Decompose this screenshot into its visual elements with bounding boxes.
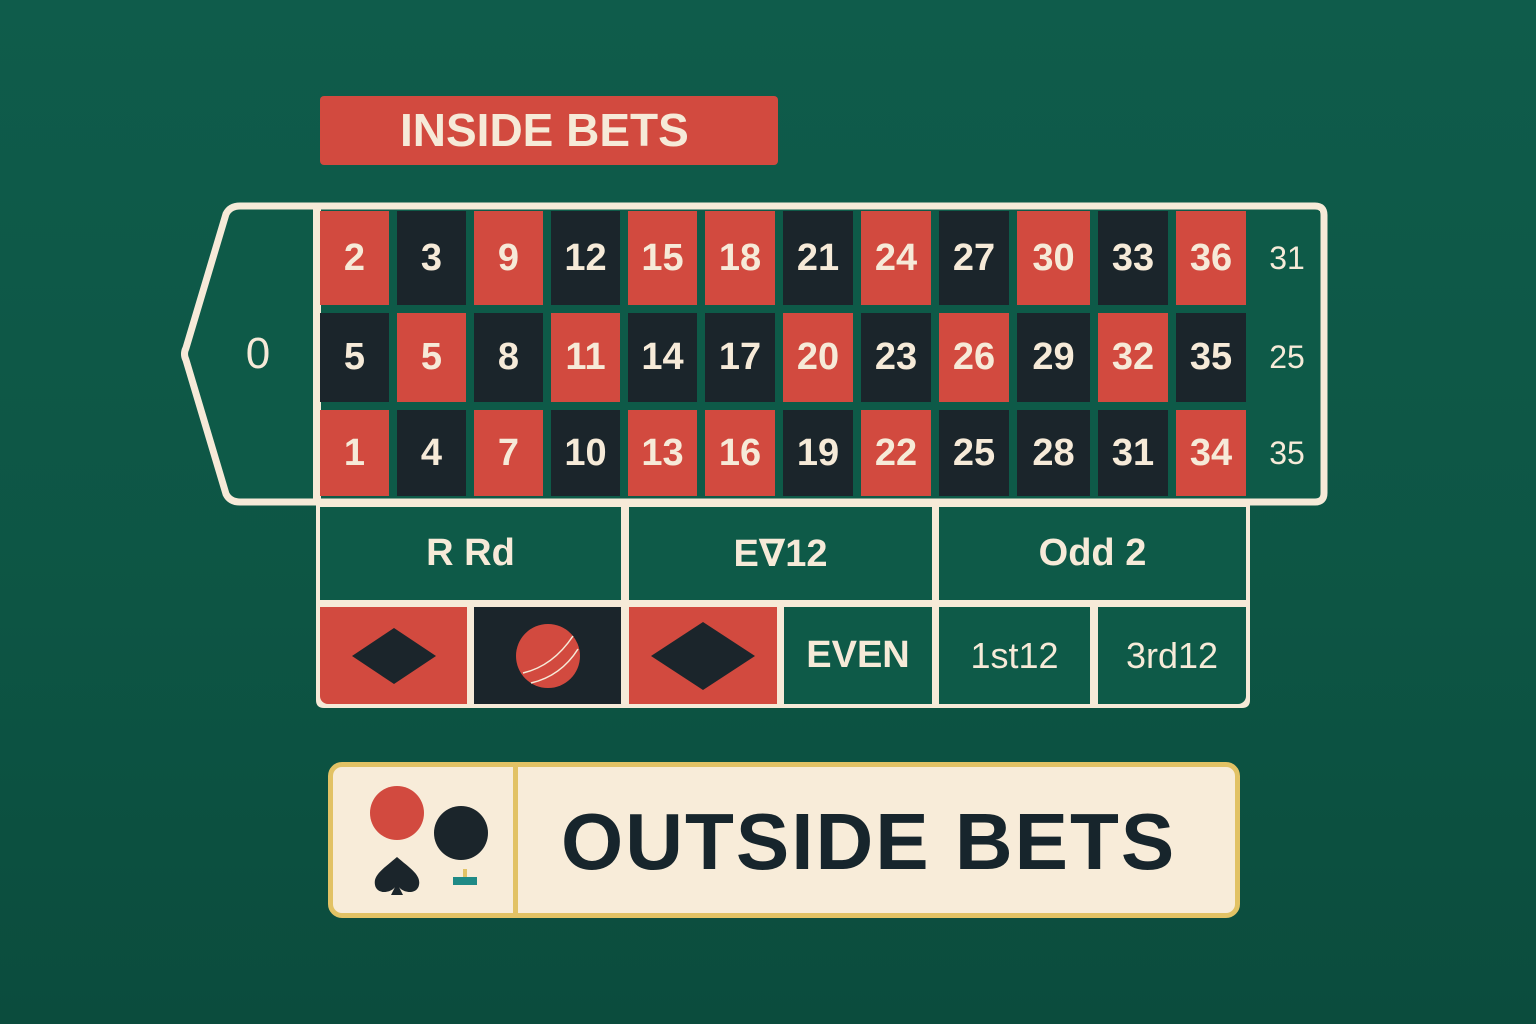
outside bet cells: 1st12 bbox=[970, 634, 1059, 676]
number grid: 19 bbox=[797, 432, 839, 474]
number grid: 16 bbox=[719, 432, 761, 474]
number grid: 22 bbox=[875, 432, 917, 474]
number grid: 7 bbox=[498, 432, 519, 474]
number grid: 1 bbox=[344, 432, 365, 474]
outside bet cells bbox=[320, 507, 1246, 704]
number grid bbox=[320, 211, 1320, 496]
icon: ball bbox=[474, 607, 621, 704]
number grid: 4 bbox=[421, 432, 442, 474]
label: inside bets bbox=[320, 96, 778, 165]
number grid: 24 bbox=[875, 236, 917, 278]
number grid: 11 bbox=[565, 336, 606, 378]
number grid: 5 bbox=[344, 336, 365, 378]
number grid: 15 bbox=[641, 236, 684, 278]
number grid: 35 bbox=[1190, 336, 1232, 378]
label: outside bets bbox=[328, 762, 1240, 918]
title: outside bets: OUTSIDE BETS bbox=[561, 797, 1176, 886]
zero: 0 bbox=[246, 329, 270, 378]
label: inside bets: INSIDE BETS bbox=[400, 104, 689, 156]
number grid: 28 bbox=[1032, 432, 1075, 474]
number grid: 12 bbox=[564, 236, 607, 278]
number grid: 3 bbox=[421, 236, 442, 278]
outside bet cells: R Rd bbox=[426, 532, 515, 574]
icon: diamond bbox=[629, 607, 777, 704]
number grid: 25 bbox=[1269, 339, 1305, 375]
number grid: 31 bbox=[1269, 240, 1305, 276]
number grid: 18 bbox=[719, 236, 761, 278]
number grid: 5 bbox=[421, 336, 442, 378]
number grid: 9 bbox=[498, 236, 519, 278]
number grid: 36 bbox=[1190, 236, 1232, 278]
number grid: 34 bbox=[1190, 432, 1232, 474]
number grid: 20 bbox=[797, 336, 839, 378]
outside bet cells: E∇12 bbox=[733, 533, 828, 575]
number grid: 8 bbox=[498, 336, 519, 378]
outside bet cells: Odd 2 bbox=[1039, 532, 1146, 574]
number grid: 33 bbox=[1112, 236, 1154, 278]
number grid: 13 bbox=[641, 432, 684, 474]
zero pocket frame bbox=[181, 202, 1328, 708]
roulette table bbox=[181, 202, 1328, 708]
number grid: 27 bbox=[953, 236, 995, 278]
number grid: 2 bbox=[344, 236, 365, 278]
number grid: 32 bbox=[1112, 336, 1154, 378]
number grid: 17 bbox=[719, 336, 761, 378]
icon: chips and spade bbox=[333, 767, 518, 913]
number grid: 26 bbox=[953, 336, 995, 378]
number grid: 25 bbox=[953, 432, 995, 474]
number grid: 10 bbox=[564, 432, 607, 474]
icon: diamond bbox=[320, 607, 467, 704]
number grid: 30 bbox=[1032, 236, 1075, 278]
number grid: 14 bbox=[641, 336, 684, 378]
number grid: 21 bbox=[797, 236, 839, 278]
number grid: 31 bbox=[1112, 432, 1154, 474]
number grid: 23 bbox=[875, 336, 917, 378]
outside bet cells: EVEN bbox=[806, 634, 910, 676]
outside bet cells: 3rd12 bbox=[1126, 634, 1218, 676]
number grid: 29 bbox=[1032, 336, 1075, 378]
number grid: 35 bbox=[1269, 434, 1305, 470]
